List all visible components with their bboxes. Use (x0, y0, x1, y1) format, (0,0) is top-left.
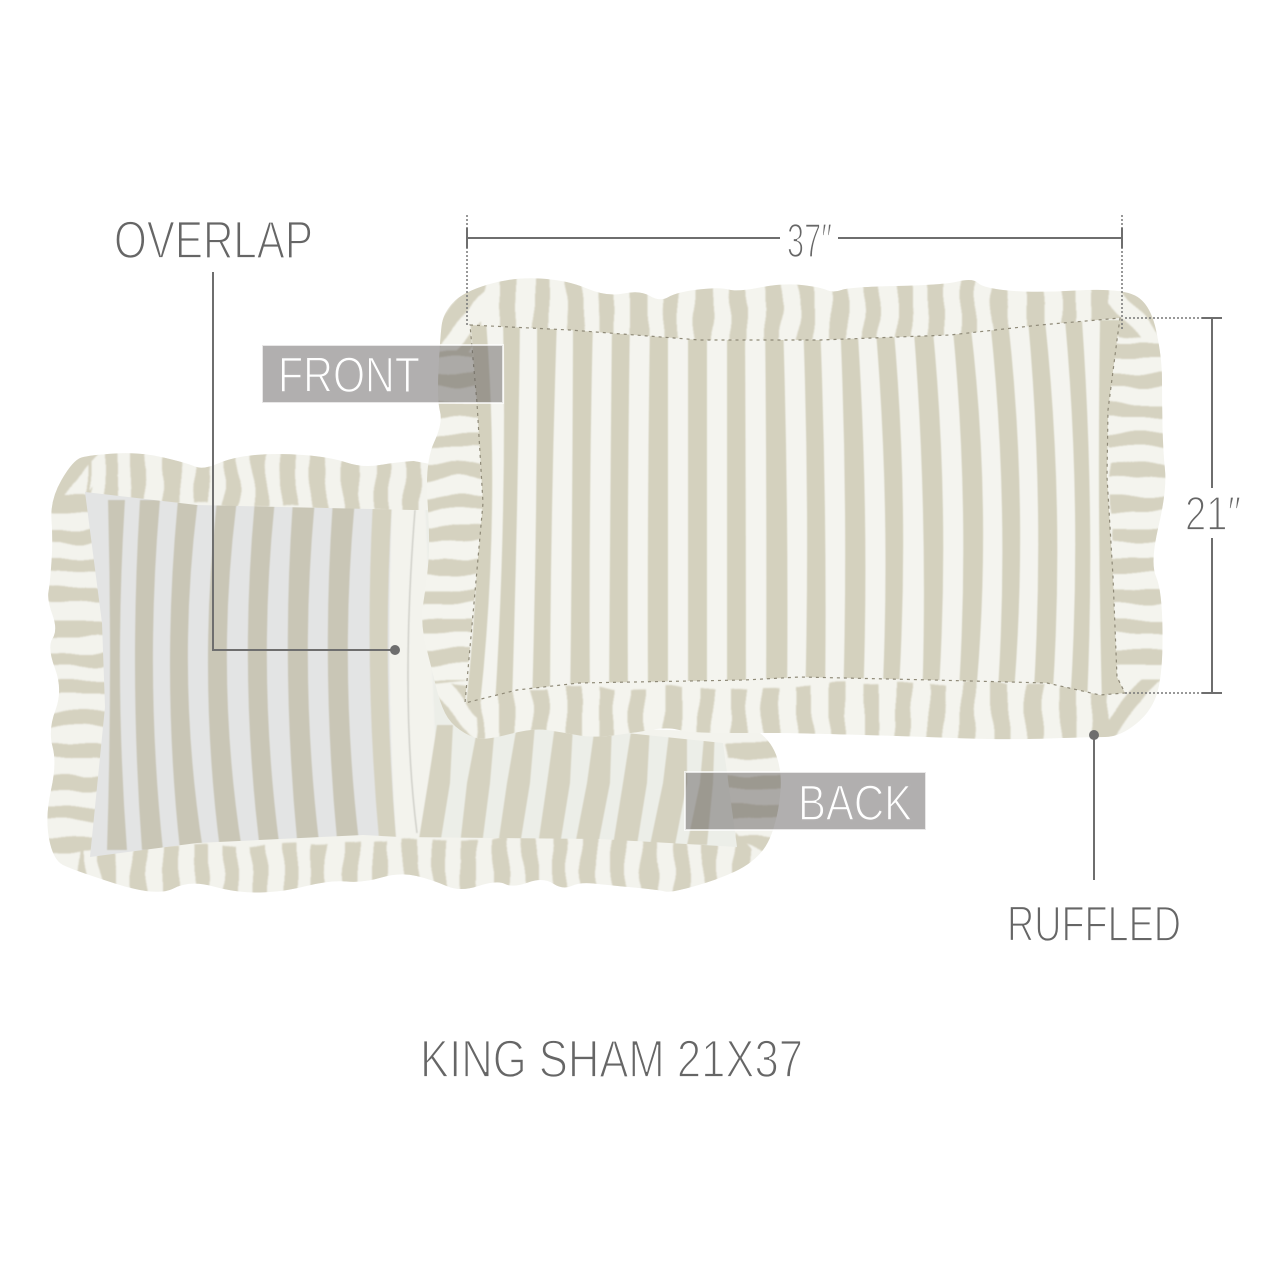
label: 37 inch width: 37″ (787, 215, 832, 268)
front ruffle (422, 278, 1166, 740)
label: ruffled: RUFFLED (1007, 896, 1181, 952)
overlap leader line (213, 272, 400, 655)
label: 21 inch height: 21″ (1185, 488, 1241, 541)
label: overlap: OVERLAP (114, 211, 313, 270)
front tag: FRONT (278, 347, 420, 403)
caption: king sham size: KING SHAM 21X37 (420, 1030, 803, 1089)
width dimension line (467, 215, 1122, 330)
front panel with striped fabric (455, 315, 1135, 710)
front pillow sham (422, 278, 1166, 740)
back tag (685, 772, 926, 831)
front tag (262, 345, 503, 403)
height dimension line (1125, 318, 1222, 693)
stitched seam (465, 318, 1125, 703)
back ruffle (48, 453, 781, 892)
product size diagram (48, 215, 1240, 1077)
ruffled leader line (1089, 730, 1099, 880)
back pillow sham (48, 453, 781, 892)
back panel with striped fabric (80, 490, 750, 860)
back tag: BACK (798, 775, 912, 831)
